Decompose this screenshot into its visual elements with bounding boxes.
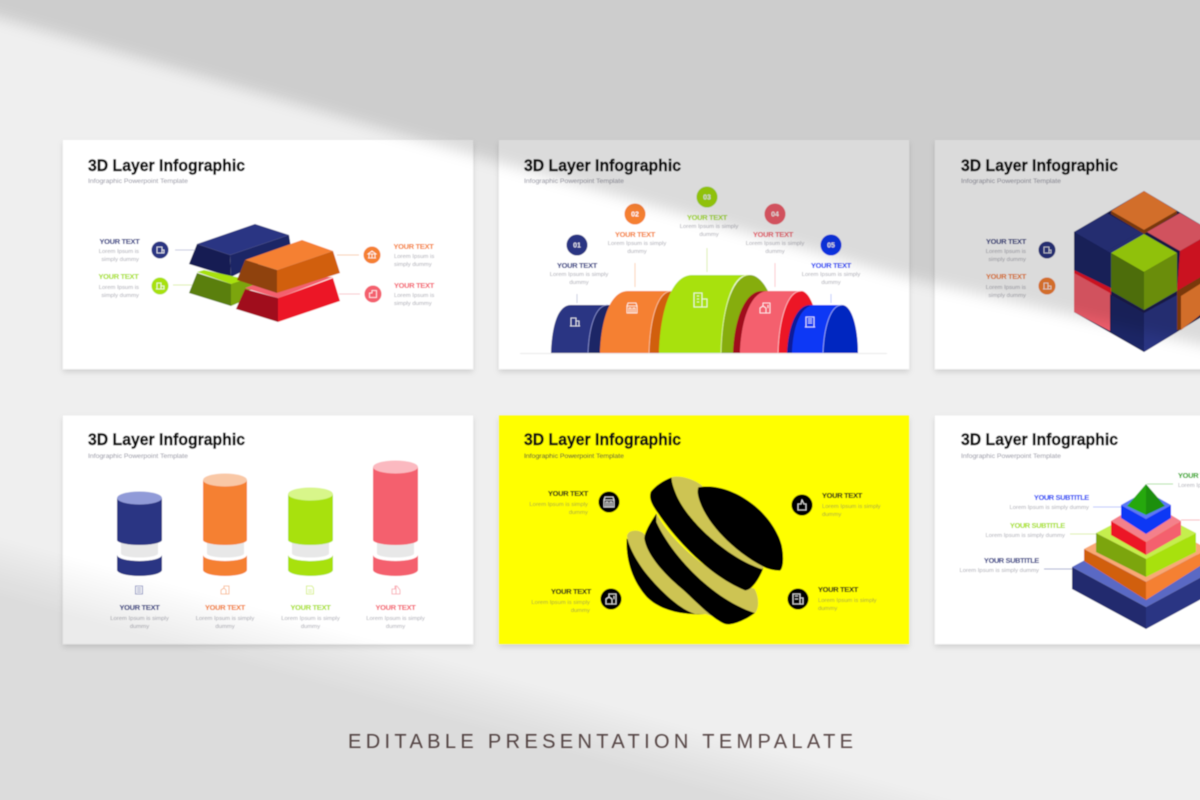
callout: blue subtitle — [1009, 493, 1121, 511]
callout: green subtitle: Lorem Ipsum is simply dummy — [985, 533, 1065, 539]
callout: top right green — [1147, 471, 1200, 489]
callout 02: dummy — [627, 249, 647, 255]
callout: navy — [99, 237, 195, 263]
callout 03: Lorem Ipsum is simply — [680, 224, 738, 230]
callout: navy — [986, 237, 1056, 263]
callout: bottom left: YOUR TEXT — [551, 587, 592, 596]
callout: navy: YOUR TEXT — [99, 237, 140, 246]
callout 01: 01 — [573, 242, 581, 250]
callout 02: Lorem Ipsum is simply — [608, 241, 666, 247]
label: green — [281, 586, 340, 630]
callout: bottom right: Lorem Ipsum is simply — [818, 598, 877, 604]
panel: slide 3 cube — [935, 140, 1200, 369]
chart: stacked 3D bars — [189, 224, 340, 322]
footer caption: EDITABLE PRESENTATION TEMPALATE — [348, 731, 853, 753]
callout 05: Lorem Ipsum is simply — [802, 272, 860, 278]
callout: green subtitle: YOUR SUBTITLE — [1010, 521, 1065, 530]
callout 05: YOUR TEXT — [811, 261, 852, 270]
callout: orange — [337, 242, 434, 268]
cylinder: pink — [373, 460, 418, 576]
callout 02: 02 — [631, 212, 639, 218]
callout: navy: Lorem Ipsum is — [99, 249, 139, 255]
title: 3D Layer Infographic — [524, 430, 681, 449]
callout: green: simply dummy — [101, 293, 139, 299]
callout 03 — [680, 186, 738, 272]
callout: green — [98, 272, 192, 299]
callout: navy: simply dummy — [988, 257, 1026, 263]
label: orange: dummy — [215, 624, 235, 630]
chart: 3D arches — [551, 275, 858, 353]
callout: top left — [529, 489, 620, 516]
subtitle: Infographic Powerpoint Template — [88, 178, 188, 185]
title: 3D Layer Infographic — [961, 430, 1118, 449]
callout 04: Lorem Ipsum is simply — [746, 241, 804, 247]
callout: navy: simply dummy — [101, 257, 139, 263]
callout: pink: Lorem Ipsum is — [394, 293, 434, 299]
callout: navy: YOUR TEXT — [986, 237, 1027, 246]
label: pink: Lorem Ipsum is simply — [366, 616, 425, 622]
callout: bottom right: YOUR TEXT — [818, 585, 859, 594]
title: 3D Layer Infographic — [88, 156, 245, 175]
callout 01: YOUR TEXT — [557, 261, 598, 270]
callout 01 — [550, 234, 608, 303]
callout 03: 03 — [703, 194, 711, 202]
panel: slide 2 arches — [499, 140, 909, 369]
label: orange: Lorem Ipsum is simply — [196, 616, 254, 622]
title: 3D Layer Infographic — [88, 430, 245, 449]
title: 3D Layer Infographic — [961, 156, 1118, 175]
label: navy: dummy — [130, 624, 149, 630]
callout 04: 04 — [771, 212, 779, 218]
label: green: YOUR TEXT — [290, 603, 331, 612]
subtitle: Infographic Powerpoint Template — [524, 178, 624, 185]
cylinder: orange — [203, 474, 247, 576]
callout: top left: Lorem Ipsum is simply — [529, 502, 588, 508]
callout: bottom left: dummy — [571, 608, 590, 614]
callout 04: YOUR TEXT — [753, 230, 794, 239]
callout: bottom right: dummy — [818, 606, 837, 612]
callout: top left: YOUR TEXT — [548, 489, 589, 498]
callout: navy: Lorem Ipsum is — [986, 249, 1026, 255]
callout: top right: dummy — [822, 512, 841, 518]
callout 05: dummy — [821, 280, 841, 286]
title: 3D Layer Infographic — [524, 156, 681, 175]
cylinder: green — [288, 488, 333, 576]
callout: top right: Lorem Ipsum is simply — [822, 504, 881, 510]
panel: slide 1 stacked bars — [63, 140, 473, 369]
callout 01: Lorem Ipsum is simply — [550, 272, 608, 278]
callout 05 — [802, 234, 860, 303]
callout: top right: YOUR TEXT — [822, 491, 863, 500]
label: navy: Lorem Ipsum is simply — [110, 616, 169, 622]
panel: slide 5 yellow sphere — [499, 416, 909, 644]
connector: pink — [1181, 519, 1200, 521]
callout: navy subtitle — [959, 556, 1072, 574]
callout: pink: simply dummy — [394, 301, 432, 307]
callout: orange: Lorem Ipsum is — [986, 285, 1026, 291]
chart: sliced sphere — [627, 477, 783, 624]
callout: orange — [986, 272, 1056, 299]
callout: bottom right — [788, 585, 877, 612]
icons on arches — [570, 293, 815, 327]
callout 03: YOUR TEXT — [687, 213, 728, 222]
light shadow: top diagonal — [0, 0, 1200, 358]
light shadow: lower diagonal — [0, 480, 1200, 800]
callout: top left: dummy — [569, 510, 588, 516]
callout: orange: YOUR TEXT — [986, 272, 1027, 281]
label: green: Lorem Ipsum is simply — [281, 616, 340, 622]
callout: bottom left: Lorem Ipsum is simply — [531, 600, 590, 606]
chart: 3D cube — [1074, 191, 1200, 352]
subtitle: Infographic Powerpoint Template — [524, 453, 624, 460]
label: orange: YOUR TEXT — [205, 603, 246, 612]
callout: orange: Lorem Ipsum is — [394, 254, 434, 260]
label: green: dummy — [301, 624, 320, 630]
callout: pink — [339, 281, 435, 307]
callout: bottom left — [531, 587, 622, 614]
subtitle: Infographic Powerpoint Template — [961, 178, 1061, 185]
label: orange — [196, 586, 254, 630]
callout 04 — [746, 204, 804, 287]
callout 03: dummy — [699, 232, 719, 238]
label: pink — [366, 586, 425, 630]
label: pink: YOUR TEXT — [375, 603, 416, 612]
callout: navy subtitle: Lorem Ipsum is simply dummy — [959, 568, 1039, 574]
callout: green: Lorem Ipsum is — [99, 285, 139, 291]
panel: slide 4 cylinders — [63, 416, 473, 644]
label: navy: YOUR TEXT — [119, 603, 160, 612]
callout 04: dummy — [765, 249, 785, 255]
callout 02: YOUR TEXT — [615, 230, 656, 239]
slides group — [63, 140, 1200, 753]
callout 02 — [608, 204, 666, 287]
callout: blue subtitle: Lorem Ipsum is simply dummy — [1009, 505, 1089, 511]
callout: orange: simply dummy — [394, 262, 432, 268]
callout: navy subtitle: YOUR SUBTITLE — [984, 556, 1039, 565]
cylinder: navy — [117, 492, 162, 576]
chart: 3D pyramid — [1072, 484, 1200, 629]
callout: green subtitle — [985, 521, 1096, 539]
subtitle: Infographic Powerpoint Template — [961, 453, 1061, 460]
callout: blue subtitle: YOUR SUBTITLE — [1034, 493, 1089, 502]
callout: pink: YOUR TEXT — [394, 281, 435, 290]
panel: slide 6 pyramid — [935, 416, 1200, 644]
callout: top right — [792, 491, 881, 518]
callout 01: dummy — [569, 280, 589, 286]
callout: orange: YOUR TEXT — [394, 242, 434, 251]
callout: orange: simply dummy — [988, 293, 1026, 299]
callout: green: YOUR TEXT — [98, 272, 139, 281]
subtitle: Infographic Powerpoint Template — [88, 453, 188, 460]
label: navy — [110, 586, 169, 630]
label: pink: dummy — [386, 624, 405, 630]
callout 05: 05 — [827, 242, 835, 250]
